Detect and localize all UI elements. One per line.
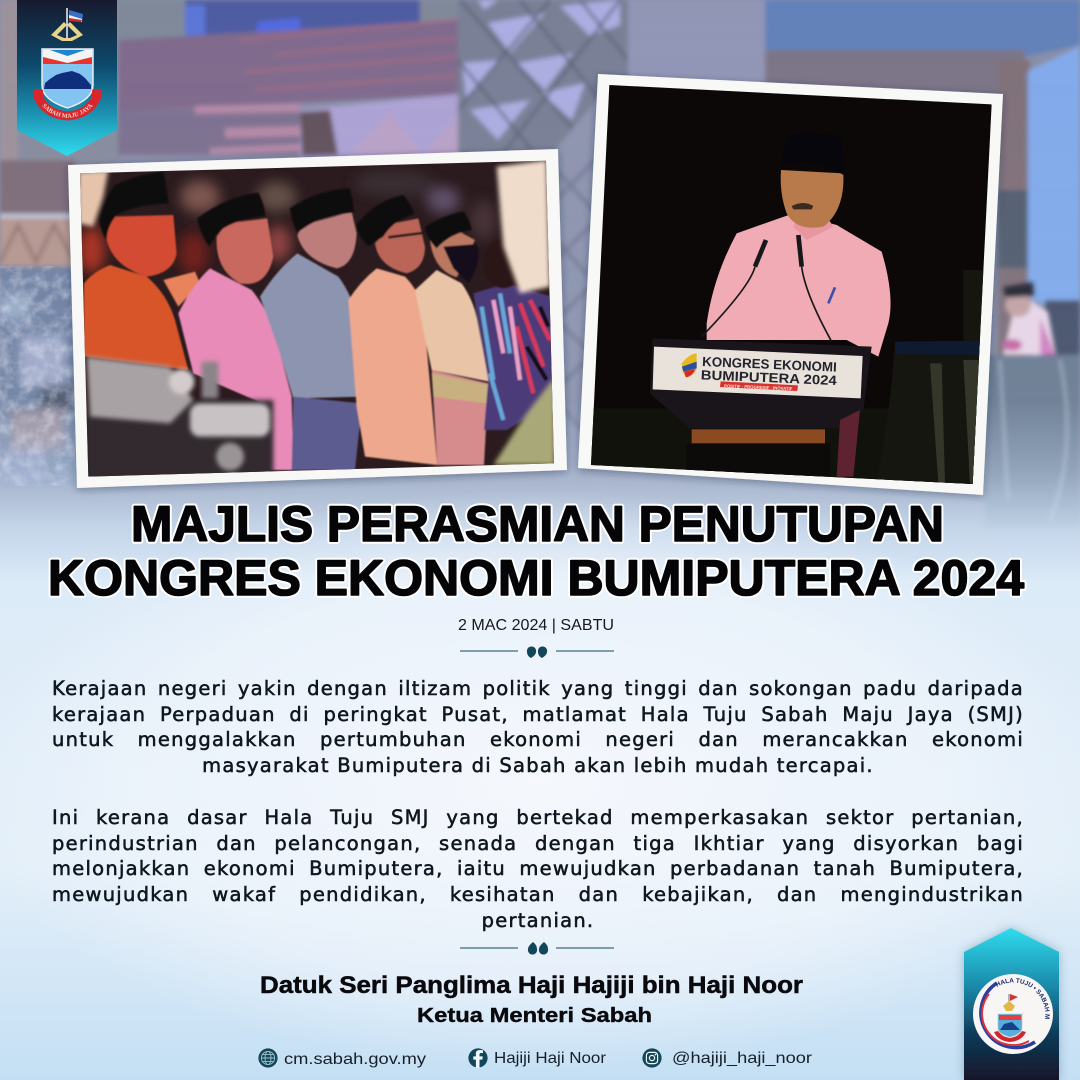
logo: round seal: HALA TUJU • SABAH MAJU JAYA	[996, 978, 1050, 1019]
man 5: cream shirt and mask	[415, 212, 489, 465]
icon: motto ribbon: SABAH MAJU JAYA	[42, 104, 93, 118]
lattice continuing between photos	[555, 90, 605, 480]
podium sign	[653, 347, 863, 398]
podium sign: POSITIF · PROGRESIF · INOVATIF	[724, 383, 793, 391]
background: small figure at right	[1002, 282, 1056, 355]
website: cm.sabah.gov.my	[284, 1051, 426, 1068]
icon: facebook	[468, 1048, 488, 1068]
icon: motto ribbon	[34, 89, 102, 120]
body paragraph 1	[52, 677, 1024, 777]
title: KONGRES EKONOMI BUMIPUTERA 2024	[48, 550, 1024, 606]
body paragraph 2: melonjakkan ekonomi Bumiputera, iaitu mewujudkan perbadanan tanah Bumiputera,	[52, 857, 1024, 880]
body paragraph 1: kerajaan Perpaduan di peringkat Pusat, matlamat Hala Tuju Sabah Maju Jaya (SMJ)	[52, 703, 1024, 726]
title	[48, 496, 1024, 606]
photo frame: white border	[578, 74, 1003, 495]
speaker: pink shirt	[706, 170, 891, 357]
icon: globe	[258, 1048, 278, 1068]
small crest	[994, 994, 1026, 1042]
photo: Chief Minister at podium	[578, 70, 1013, 503]
body paragraph 1: masyarakat Bumiputera di Sabah akan lebih mudah tercapai.	[202, 754, 874, 777]
man 4: peach shirt	[348, 195, 437, 465]
facebook name: Hajiji Haji Noor	[494, 1050, 607, 1067]
title: KONGRES EKONOMI BUMIPUTERA 2024	[48, 550, 1024, 606]
icon: flag on mast	[67, 8, 83, 41]
man 6: patterned batik shirt	[473, 238, 552, 430]
social links	[258, 1048, 813, 1068]
blurred foreground: shoulder, camera	[78, 160, 555, 478]
body paragraph 2: pertanian.	[482, 909, 594, 932]
instagram handle: @hajiji_haji_noor	[672, 1050, 813, 1067]
date: 2 MAC 2024 | SABTU	[458, 617, 614, 634]
body paragraph 2	[52, 806, 1024, 932]
body paragraph 1: Kerajaan negeri yakin dengan iltizam politik yang tinggi dan sokongan padu daripada	[52, 677, 1024, 700]
title: MAJLIS PERASMIAN PENUTUPAN	[131, 496, 944, 552]
podium sign: BUMIPUTERA 2024	[701, 367, 838, 388]
photo: leaders standing	[60, 140, 570, 500]
podium sign: KONGRES EKONOMI	[702, 354, 837, 375]
icon: golden arms	[51, 22, 83, 41]
side table	[877, 341, 980, 485]
divider: opening quote	[460, 646, 614, 658]
microphones	[702, 235, 832, 342]
background: pale centre glow	[0, 490, 1080, 1070]
body paragraph 1: untuk menggalakkan pertumbuhan ekonomi negeri dan merancakkan ekonomi	[52, 728, 1024, 751]
body paragraph 2: Ini kerana dasar Hala Tuju SMJ yang bertekad memperkasakan sektor pertanian,	[52, 806, 1024, 829]
speaker role: Ketua Menteri Sabah	[417, 1005, 652, 1027]
left of the crowd	[0, 160, 75, 216]
speaker name: Datuk Seri Panglima Haji Hajiji bin Haji Noor	[260, 972, 803, 999]
badge: Sabah coat of arms tag	[17, 0, 117, 156]
man 2: pink shirt	[178, 193, 293, 470]
man 3: grey-blue shirt	[260, 188, 363, 470]
title: MAJLIS PERASMIAN PENUTUPAN	[131, 496, 944, 552]
body paragraph 2: mewujudkan wakaf pendidikan, kesihatan dan kebajikan, dan mengindustrikan	[52, 883, 1024, 906]
man 1: orange shirt	[84, 172, 200, 370]
photo frame: white border	[68, 149, 567, 488]
icon: shield with Mount Kinabalu	[42, 49, 93, 108]
divider: closing quote	[460, 942, 614, 955]
body paragraph 2: perindustrian dan pelancongan, senada dengan tiga Ikhtiar yang disyorkan bagi	[52, 832, 1024, 855]
podium	[650, 338, 872, 477]
icon: instagram	[642, 1048, 662, 1068]
